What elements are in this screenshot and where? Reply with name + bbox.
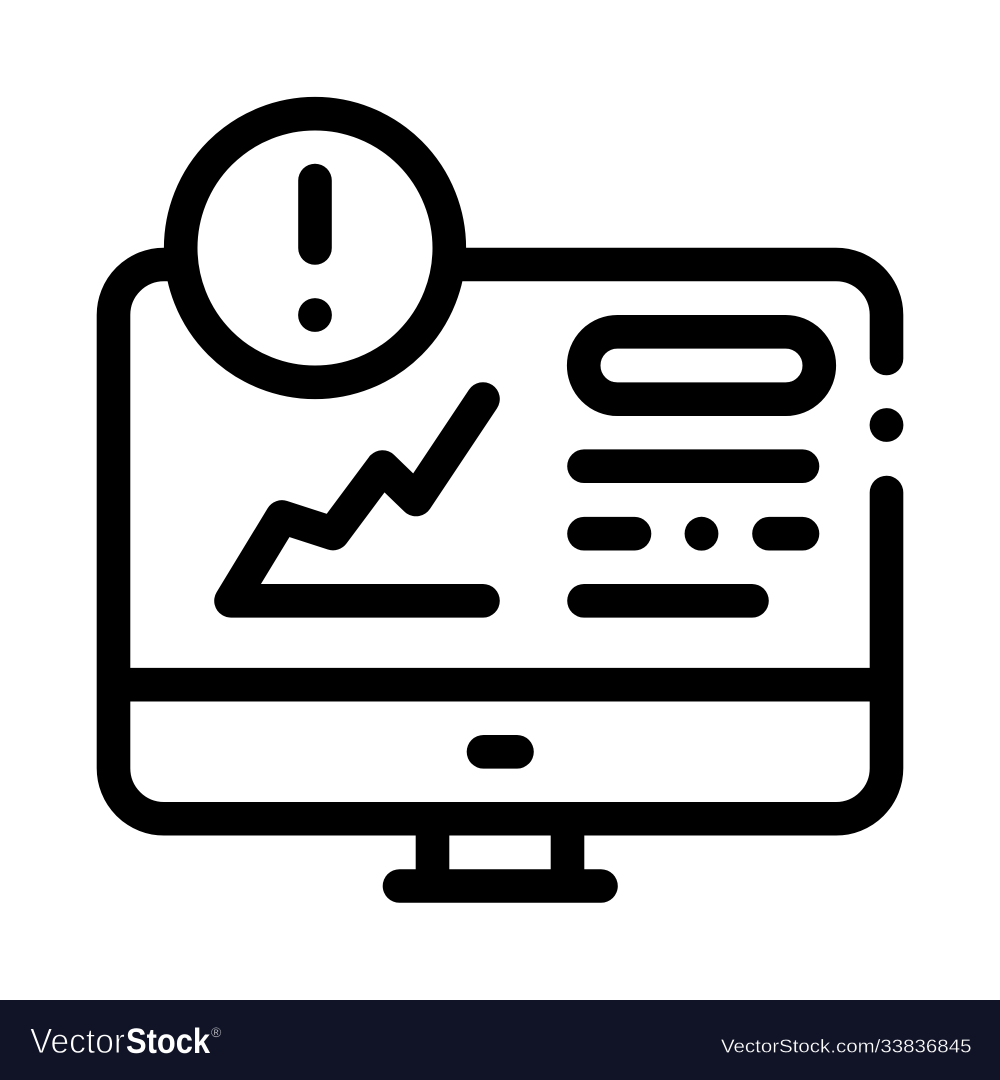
line chart — [231, 399, 483, 601]
text line 1 — [584, 449, 802, 483]
screen divider — [114, 668, 886, 702]
icon: monitor with alert — [113, 114, 903, 886]
monitor button — [484, 735, 517, 769]
logo: VectorStock: Vector — [30, 1022, 125, 1061]
monitor side dot — [870, 408, 903, 442]
icon: exclamation mark — [298, 180, 332, 332]
alert circle — [181, 114, 449, 382]
text line 2 with dot — [584, 517, 802, 551]
image id url: VectorStock.com/33836845 — [721, 1036, 972, 1056]
monitor stand — [400, 820, 601, 886]
logo registered mark: ® — [211, 1024, 222, 1040]
info pill — [584, 332, 819, 399]
monitor frame — [113, 264, 886, 819]
logo: VectorStock — [30, 1022, 210, 1061]
logo: VectorStock: Stock — [126, 1022, 210, 1061]
text line 3 — [584, 584, 752, 618]
footer bar — [0, 1000, 1000, 1080]
